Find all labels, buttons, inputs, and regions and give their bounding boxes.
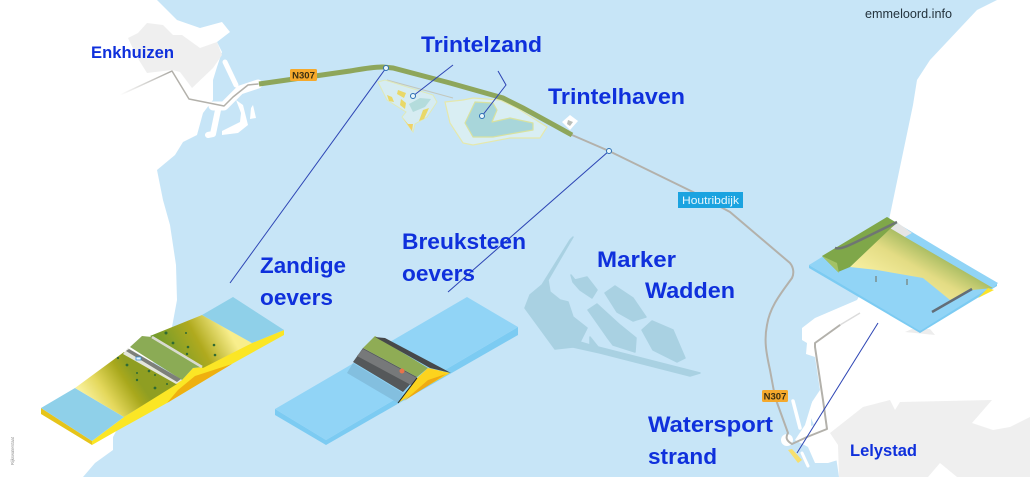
label: Zandige oevers: Zandige [260,253,346,278]
model: Watersport strand [809,217,998,335]
leader line: Trintelzand east [480,71,506,118]
road label: Houtribdijk: Houtribdijk [682,195,740,207]
core: orange [167,364,232,403]
dike crest [130,336,202,380]
section: orange [404,374,446,401]
section: yellow [398,368,450,403]
label: Watersport strand [648,412,774,469]
label: Enkhuizen: Enkhuizen [91,43,174,62]
label: Marker Wadden: Wadden [645,278,735,303]
road badge: N307 top: N307 [292,70,315,82]
shadow [905,329,935,335]
label: Lelystad: Lelystad [850,441,917,460]
road [123,348,182,384]
credit: vertical small print: Rijkswaterstaat [10,436,15,465]
Enkhuizen harbour [208,62,258,135]
Enkhuizen town area [128,23,222,88]
road: fading Lelystad approach [840,313,860,325]
road label: Houtribdijk [678,192,743,208]
water: near [41,388,124,441]
label: Watersport strand: Watersport [648,412,774,437]
base top [809,217,997,331]
beach [850,228,993,300]
road: Houtribdijk [572,135,840,444]
label: Trintelhaven: Trintelhaven [548,84,685,109]
label: Marker Wadden: Marker [597,247,676,272]
dike: green [822,217,897,272]
breakwater [932,289,972,312]
label: Breuksteen oevers [402,229,526,286]
trees [117,332,216,389]
leader line: Watersport strand [797,323,878,453]
water: far [202,297,284,343]
hard edge: white terrain [890,223,912,237]
side: left edge [41,408,92,445]
leader line: Trintelzand west [410,65,453,98]
base top [275,297,518,440]
crest: green [363,336,428,377]
car [136,357,141,360]
land: Flevoland coast [795,0,1030,477]
side: yellow cross-section [92,330,284,445]
section outline [398,378,417,403]
road: Enkhuizen approach [120,71,258,106]
model: Zandige oevers [41,297,284,445]
base side [275,327,518,445]
label: Breuksteen oevers: oevers [402,261,475,286]
leader line: Breuksteen oevers [448,148,612,292]
slope: near [75,352,177,417]
label: Marker Wadden [597,247,735,303]
road badge: N307 bottom: N307 [764,392,786,402]
Lelystad harbour [781,352,814,466]
icon: Trintelhaven harbour [562,115,578,130]
label: Zandige oevers [260,253,346,310]
land: Noord-Holland coast [0,0,230,477]
tip: yellow [978,288,994,298]
revetment: dark [353,348,417,392]
water: far channel [905,233,998,288]
submerged revetment [347,363,403,403]
model: Breuksteen oevers [275,297,518,445]
road [357,349,417,385]
Trintelzand islands [378,80,547,145]
dike road [835,222,897,248]
beach: watersport strand [788,449,802,463]
Marker Wadden islands [525,237,700,376]
car [400,368,404,374]
watermark: emmeloord.info: emmeloord.info [865,7,952,21]
slope: far [150,315,252,368]
label: Zandige oevers: oevers [260,285,333,310]
label: Watersport strand: strand [648,444,717,469]
Lelystad town area [830,400,1030,477]
label: Trintelzand: Trintelzand [421,32,542,57]
service road [152,337,202,367]
revetment: back [375,337,451,373]
poles [876,276,907,285]
label: Breuksteen oevers: Breuksteen [402,229,526,254]
dike: green section [259,67,572,135]
leader line: Zandige oevers [230,66,388,283]
base side [809,265,997,333]
dike: light end [822,256,839,273]
